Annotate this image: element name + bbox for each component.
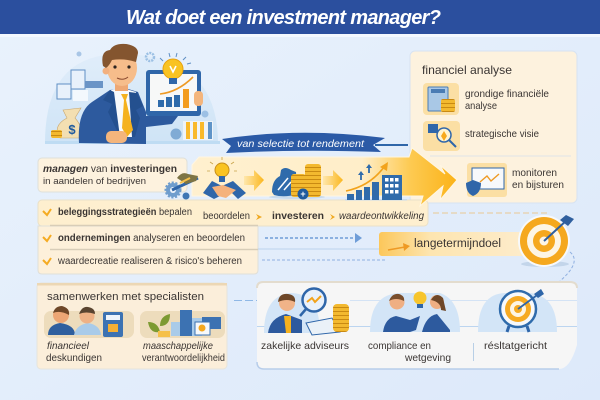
icon: gears and tools <box>166 173 198 200</box>
icon: monitoring screen and shield <box>466 163 507 197</box>
tablet with chart <box>146 70 201 116</box>
text: monitoren en bijsturen: en bijsturen <box>512 179 564 191</box>
check item 1: beleggingsstrategieën bepalen <box>58 207 192 218</box>
panel: managen van investeringen: in aandelen of bedrijven <box>43 176 146 187</box>
money bag <box>51 108 81 138</box>
banner: van selectie tot rendement: van selectie tot rendement <box>237 138 365 150</box>
text: compliance en wetgeving: compliance en <box>368 340 431 352</box>
text: financieel deskundigen: deskundigen <box>46 352 102 364</box>
goal bar: langetermijndoel: langetermijndoel <box>414 238 501 250</box>
text: compliance en wetgeving: wetgeving <box>404 352 451 364</box>
arrow <box>323 170 343 191</box>
panel: samenwerken met specialisten <box>37 283 227 369</box>
text: waardeontwikkeling: waardeontwikkeling <box>339 211 424 222</box>
suit <box>79 88 178 144</box>
icon: investment bag and coins: + <box>300 189 306 199</box>
text: maatschappelijke verantwoordelijkheid: verantwoordelijkheid <box>142 352 225 364</box>
text: financieel deskundigen: financieel <box>47 340 90 352</box>
panel: managen van investeringen <box>38 158 187 192</box>
goal bar: langetermijndoel <box>379 232 525 256</box>
text: strategische visie: strategische visie <box>465 128 539 140</box>
icon: investment bag and coins <box>269 164 325 200</box>
icon: lightbulb and handshake <box>203 157 246 199</box>
panel: partners <box>257 282 577 369</box>
text: resultaatgericht: résltatgericht <box>484 340 547 352</box>
head <box>102 44 138 91</box>
heading: financiel analyse: financiel analyse <box>422 63 512 77</box>
tie <box>121 94 133 137</box>
connector line <box>234 300 258 302</box>
illustration: investment manager with tablet <box>45 44 220 144</box>
check item 2: ondernemingen analyseren en beoordelen <box>58 233 245 244</box>
heading: samenwerken met specialisten: samenwerken met specialisten <box>47 291 204 303</box>
icon: target with dart <box>518 215 574 267</box>
panel: process flow <box>38 148 457 226</box>
text: maatschappelijke verantwoordelijkheid: maaschappelijke <box>143 340 213 352</box>
storage bars <box>170 110 213 140</box>
icon: plant and buildings <box>140 310 225 338</box>
text: investeren: investeren <box>272 210 324 222</box>
panel: financiel analyse <box>410 51 577 203</box>
icon: two people in conversation <box>370 292 460 332</box>
icon: target result <box>478 289 557 332</box>
icon: business adviser <box>264 288 349 335</box>
check item 3: waardecreatie realiseren & risico's beheren <box>57 256 242 267</box>
text: grondige financiele analyse: grondige financiële <box>465 88 549 100</box>
icon: calculator and coins <box>423 83 459 115</box>
icon: growth bars and building <box>345 162 407 200</box>
title banner: Wat doet een investment manager? <box>126 7 441 29</box>
icon: two specialists and calculator <box>44 306 134 338</box>
money bag: $ <box>68 122 76 137</box>
text: monitoren en bijsturen: monitoren <box>512 167 557 179</box>
panel: managen van investeringen: managen van investeringen <box>43 163 177 175</box>
icon: strategic vision <box>423 121 460 151</box>
lightbulb <box>160 53 191 84</box>
title banner <box>0 0 600 37</box>
connector arrows <box>258 213 574 281</box>
text: zakelijke adviseurs: zakelijke adviseurs <box>261 340 349 352</box>
banner: van selectie tot rendement <box>222 133 408 153</box>
text: beoordelen: beoordelen <box>203 211 250 222</box>
text: grondige financiele analyse: analyse <box>465 100 497 112</box>
arrow <box>244 170 264 191</box>
panel: taken checklist <box>38 207 258 274</box>
